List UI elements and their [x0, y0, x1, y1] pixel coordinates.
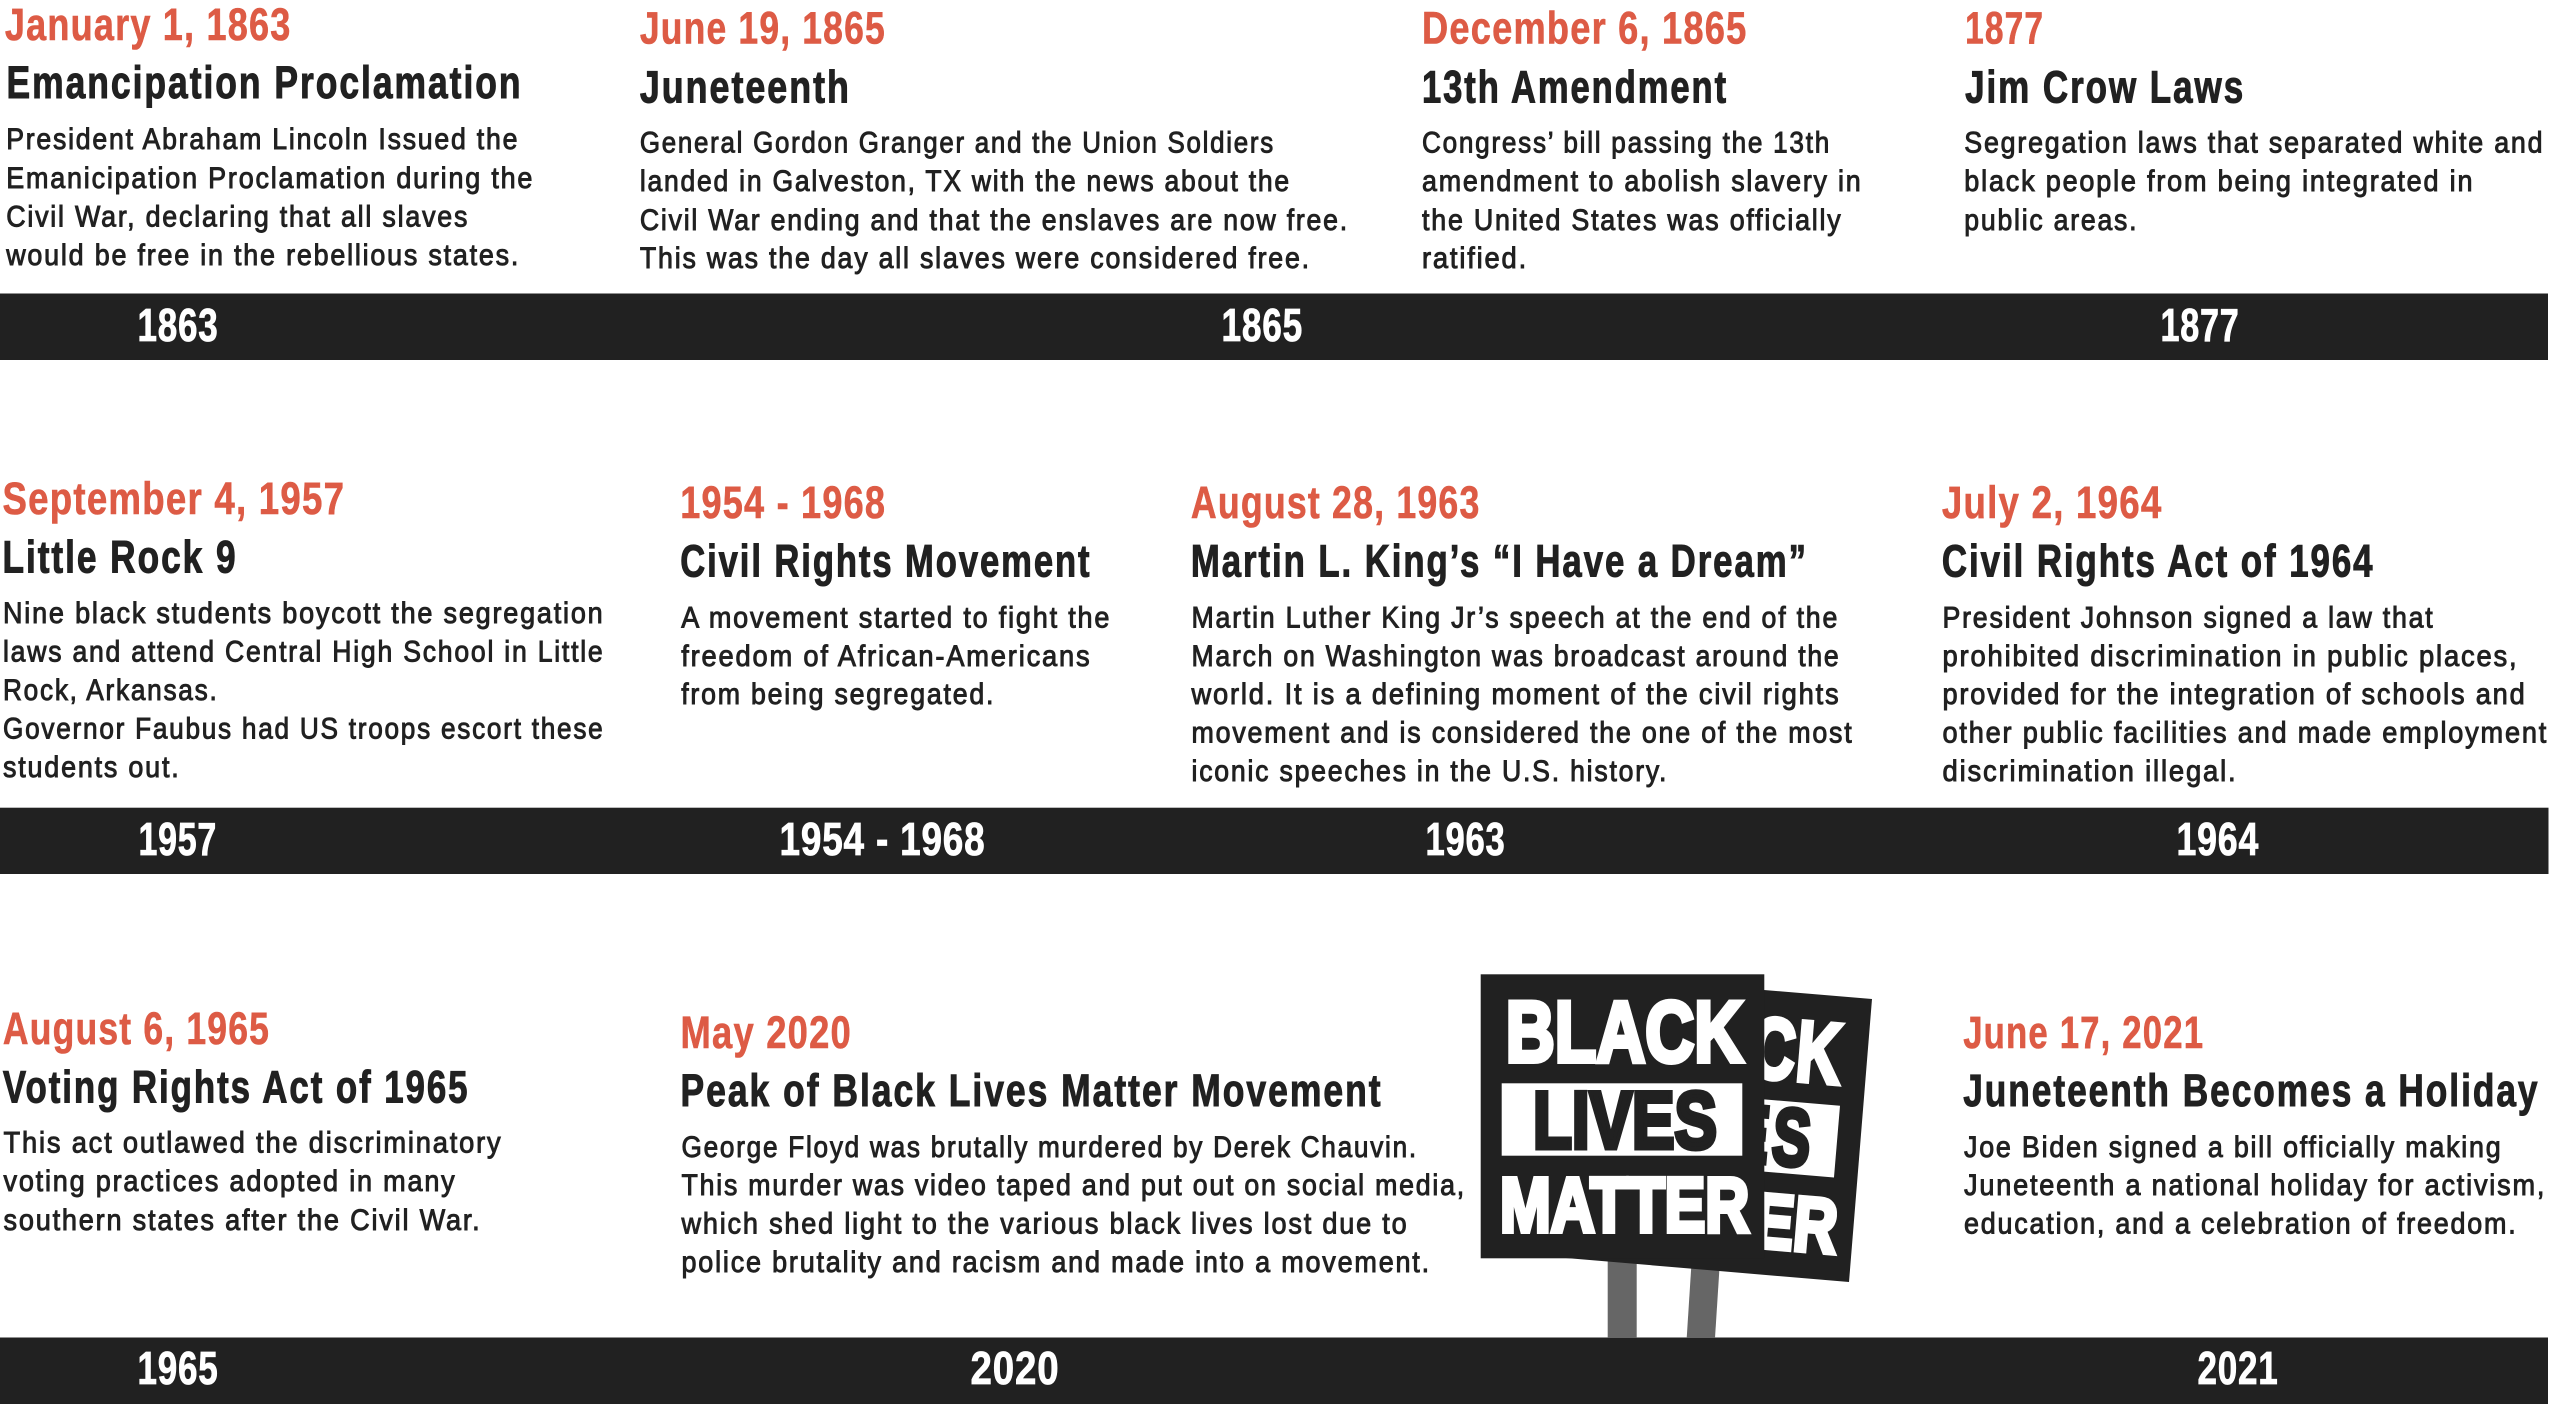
- panel: Civil Rights Act of 1964: [1942, 477, 2548, 788]
- description: iconic speeches in the U.S. history.: [1192, 755, 1668, 788]
- heading: Jim Crow Laws: [1965, 62, 2245, 113]
- heading: 13th Amendment: [1422, 62, 1728, 113]
- row 2 timeline bar: 1954 - 1968: [780, 813, 986, 865]
- heading: Peak of Black Lives Matter Movement: [680, 1065, 1382, 1116]
- front sign: MATTER: [1500, 1162, 1749, 1248]
- back sign: [1566, 989, 1872, 1282]
- heading: Civil Rights Act of 1964: [1942, 535, 2374, 586]
- description: [1191, 602, 1854, 788]
- description: This was the day all slaves were considered free.: [640, 242, 1311, 275]
- description: [681, 602, 1111, 711]
- description: [1964, 1131, 2546, 1240]
- description: ratified.: [1422, 242, 1528, 275]
- row 2 timeline bar: 1957: [138, 813, 217, 865]
- panel: Civil Rights Movement: [680, 477, 1111, 711]
- description: the United States was officially: [1422, 204, 1842, 237]
- back sign: LIVES: [1629, 1080, 1818, 1185]
- panel: Little Rock 9: [2, 473, 604, 784]
- description: prohibited discrimination in public places,: [1942, 640, 2518, 673]
- row 1 timeline bar: [0, 294, 2548, 360]
- back sign: MATTER: [1588, 1164, 1841, 1270]
- description: from being segregated.: [681, 678, 995, 711]
- panel: Emancipation Proclamation: [5, 0, 534, 272]
- back sign: BLACK: [1616, 989, 1847, 1103]
- date: December 6, 1865: [1422, 2, 1748, 53]
- description: which shed light to the various black lives lost due to: [681, 1208, 1408, 1241]
- date: August 28, 1963: [1191, 477, 1480, 528]
- description: George Floyd was brutally murdered by Derek Chauvin.: [682, 1131, 1418, 1164]
- description: A movement started to fight the: [681, 601, 1111, 634]
- panel: Jim Crow Laws: [1964, 2, 2544, 237]
- description: police brutality and racism and made into a movement.: [682, 1246, 1431, 1279]
- description: freedom of African-Americans: [681, 640, 1092, 673]
- date: September 4, 1957: [2, 473, 345, 524]
- description: President Abraham Lincoln Issued the: [6, 123, 519, 156]
- description: This murder was video taped and put out on social media,: [682, 1169, 1466, 1202]
- heading: Civil Rights Movement: [680, 535, 1092, 586]
- date: May 2020: [680, 1007, 852, 1058]
- row 2 timeline bar: 1963: [1426, 813, 1506, 865]
- row 2 timeline bar: [0, 808, 2548, 874]
- description: black people from being integrated in: [1964, 165, 2474, 198]
- description: landed in Galveston, TX with the news about the: [640, 165, 1291, 198]
- description: public areas.: [1964, 204, 2138, 237]
- description: [1942, 602, 2548, 788]
- description: would be free in the rebellious states.: [5, 239, 520, 272]
- description: General Gordon Granger and the Union Soldiers: [640, 127, 1275, 160]
- description: [681, 1131, 1466, 1279]
- description: Emanicipation Proclamation during the: [6, 162, 534, 195]
- date: January 1, 1863: [5, 0, 292, 50]
- heading: Emancipation Proclamation: [6, 57, 522, 108]
- panel: Voting Rights Act of 1965: [3, 1003, 503, 1237]
- date: July 2, 1964: [1942, 477, 2162, 528]
- description: voting practices adopted in many: [4, 1165, 456, 1198]
- row 1 timeline bar: 1865: [1222, 299, 1303, 351]
- panel: 13th Amendment: [1422, 2, 1862, 275]
- description: world. It is a defining moment of the civil rights: [1191, 678, 1840, 711]
- description: March on Washington was broadcast around the: [1192, 640, 1840, 673]
- description: Congress’ bill passing the 13th: [1422, 127, 1831, 160]
- front sign: [1481, 974, 1764, 1258]
- front sign: BLACK: [1506, 984, 1743, 1080]
- row 1 timeline bar: 1877: [2160, 299, 2240, 351]
- description: [640, 126, 1349, 275]
- description: [1422, 126, 1862, 275]
- description: Martin Luther King Jr’s speech at the end of the: [1192, 601, 1839, 634]
- panel: Juneteenth: [640, 2, 1349, 275]
- description: [5, 123, 534, 272]
- heading: Juneteenth: [640, 62, 851, 113]
- description: Civil War, declaring that all slaves: [6, 201, 469, 234]
- front sign: LIVES: [1533, 1076, 1717, 1166]
- description: [3, 597, 604, 784]
- description: discrimination illegal.: [1942, 755, 2238, 788]
- heading: Voting Rights Act of 1965: [3, 1062, 470, 1113]
- heading: Martin L. King’s “I Have a Dream”: [1191, 535, 1808, 586]
- row 2 timeline bar: 1964: [2176, 813, 2259, 865]
- date: 1877: [1965, 2, 2044, 53]
- date: 1954 - 1968: [680, 477, 886, 528]
- row 3 timeline bar: 1965: [138, 1342, 218, 1394]
- description: [4, 1126, 502, 1237]
- panel: Juneteenth Becomes a Holiday: [1963, 1007, 2546, 1240]
- description: Joe Biden signed a bill officially making: [1964, 1131, 2502, 1164]
- row 3 timeline bar: [0, 1338, 2548, 1404]
- description: movement and is considered the one of the most: [1192, 716, 1854, 749]
- description: southern states after the Civil War.: [4, 1204, 482, 1237]
- date: June 17, 2021: [1963, 1007, 2204, 1058]
- description: [1964, 126, 2544, 237]
- row 3 timeline bar: 2020: [970, 1342, 1060, 1394]
- description: Civil War ending and that the enslaves are now free.: [640, 204, 1349, 237]
- row 3 timeline bar: 2021: [2198, 1342, 2278, 1394]
- heading: Little Rock 9: [2, 531, 238, 582]
- date: June 19, 1865: [640, 2, 886, 53]
- description: Rock, Arkansas.: [3, 674, 218, 707]
- panel: Peak of Black Lives Matter Movement: [680, 1007, 1466, 1279]
- row 1 timeline bar: 1863: [138, 299, 218, 351]
- panel: I Have a Dream: [1191, 477, 1854, 788]
- description: Nine black students boycott the segregation: [3, 597, 604, 630]
- date: August 6, 1965: [3, 1003, 270, 1054]
- description: students out.: [3, 751, 180, 784]
- icon: Black Lives Matter protest signs: [1481, 974, 1872, 1338]
- sign posts: [1608, 1250, 1720, 1338]
- description: This act outlawed the discriminatory: [4, 1127, 502, 1160]
- description: President Johnson signed a law that: [1942, 601, 2434, 634]
- description: laws and attend Central High School in Little: [3, 635, 604, 668]
- description: amendment to abolish slavery in: [1422, 165, 1862, 198]
- description: Governor Faubus had US troops escort these: [3, 712, 604, 745]
